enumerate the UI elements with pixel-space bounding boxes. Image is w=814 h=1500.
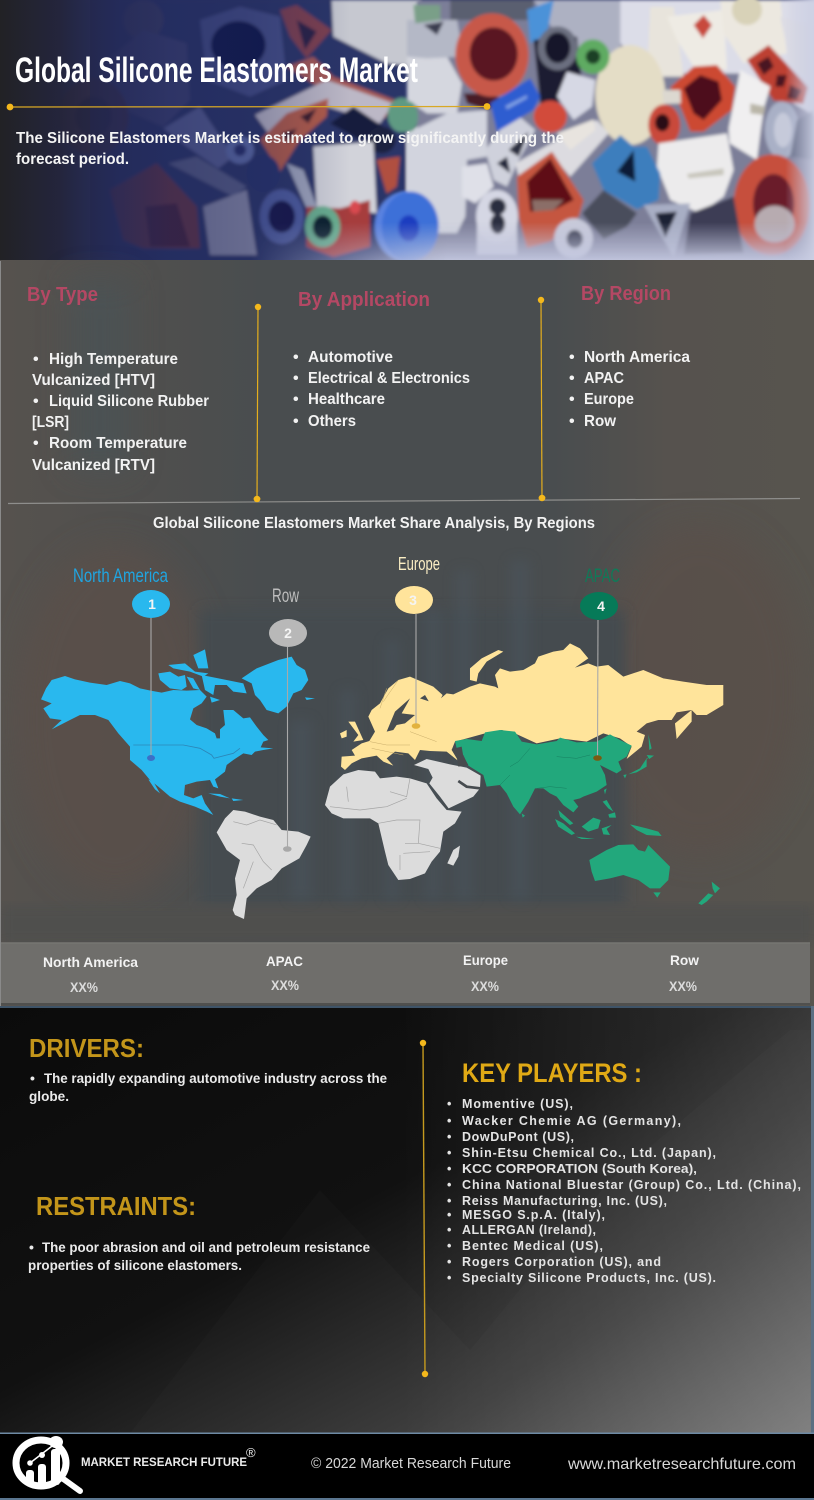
share: north america — [43, 954, 138, 995]
list: key players: • — [447, 1114, 451, 1128]
panel: hero photo banner — [0, 0, 814, 263]
brand name: MARKET RESEARCH FUTURE — [81, 1457, 247, 1469]
text: restraints: properties of silicone elastomers. — [28, 1257, 242, 1273]
intro text: forecast period. — [16, 151, 129, 168]
text: restraints — [28, 1239, 370, 1273]
list: by application: Electrical & Electronics — [308, 370, 470, 387]
list: key players: • — [447, 1146, 451, 1160]
marker 4 apac: APAC — [585, 566, 620, 587]
share: row — [669, 952, 699, 994]
list: by application: Healthcare — [308, 391, 385, 408]
share: row: XX% — [669, 978, 697, 994]
share: europe — [463, 952, 508, 994]
marker 1 north america — [73, 566, 170, 618]
list: key players: • — [447, 1097, 451, 1111]
list: key players — [447, 1097, 801, 1285]
share: europe: XX% — [471, 978, 499, 994]
marker 4 apac — [580, 566, 620, 620]
leader lines and markers — [147, 614, 602, 852]
list: key players: • — [447, 1271, 451, 1285]
heading: drivers: DRIVERS: — [29, 1033, 144, 1063]
share: north america: XX% — [70, 979, 98, 995]
marker 2 row: 2 — [284, 625, 292, 641]
list: by region: Europe — [584, 391, 634, 408]
share: europe: Europe — [463, 952, 508, 968]
icon: market research future logo — [16, 1436, 80, 1491]
divider: key players — [420, 1040, 428, 1377]
photo: right profiles — [382, 0, 814, 263]
list: by application: • — [293, 413, 299, 430]
list: by application: • — [293, 391, 299, 408]
list: key players: • — [447, 1223, 451, 1237]
brand name — [81, 1445, 256, 1469]
list: by region: • — [569, 370, 575, 387]
list: key players: Wacker Chemie AG (Germany), — [462, 1114, 681, 1128]
list: key players: ALLERGAN (Ireland), — [462, 1223, 596, 1237]
brand name: ® — [246, 1445, 256, 1460]
copyright: © 2022 Market Research Future — [311, 1455, 511, 1472]
list: by type: • — [33, 351, 39, 368]
list: by region: Row — [584, 413, 617, 430]
list: key players: • — [447, 1194, 451, 1208]
marker 1 north america: North America — [73, 566, 168, 587]
text: restraints: • — [29, 1239, 34, 1255]
text: drivers — [29, 1070, 387, 1104]
heading: restraints: RESTRAINTS: — [36, 1191, 196, 1221]
marker 2 row: Row — [272, 586, 299, 607]
panel: segmentation and map background — [0, 260, 814, 1008]
heading: by application: By Application — [298, 289, 430, 311]
share: apac — [266, 953, 303, 993]
share: apac: APAC — [266, 953, 303, 969]
title: Global Silicone Elastomers Market — [15, 51, 418, 90]
list: by region: • — [569, 349, 575, 366]
list: key players: China National Bluestar (Group) Co., Ltd. (China), — [462, 1178, 801, 1192]
share: row: Row — [670, 952, 699, 968]
list: by region: North America — [584, 349, 690, 366]
marker 3 europe — [395, 554, 440, 614]
vignette: bottom and right fade — [250, 0, 814, 261]
list: key players: • — [447, 1208, 451, 1222]
chart heading: Global Silicone Elastomers Market Share Analysis, By Regions — [153, 515, 595, 532]
list: by type — [32, 351, 209, 474]
share: apac: XX% — [271, 977, 299, 993]
overlay: dark left fade — [0, 0, 144, 260]
heading: by type: By Type — [27, 284, 98, 306]
region: row (south america, africa, middle east) — [217, 759, 481, 919]
list: key players: • — [447, 1130, 451, 1144]
list: by application — [293, 349, 470, 430]
list: by type: • — [33, 435, 39, 452]
text: drivers: globe. — [29, 1088, 69, 1104]
list: by application: • — [293, 349, 299, 366]
world map — [41, 614, 723, 919]
list: key players: • — [447, 1239, 451, 1253]
list: by region: • — [569, 413, 575, 430]
marker 2 row — [269, 586, 307, 647]
website: www.marketresearchfuture.com — [567, 1456, 796, 1473]
list: by type: High Temperature — [49, 351, 178, 368]
list: key players: Rogers Corporation (US), and — [462, 1255, 661, 1269]
marker 3 europe: 3 — [409, 592, 417, 608]
list: key players: KCC CORPORATION (South Korea), — [462, 1162, 697, 1176]
list: by application: Automotive — [308, 349, 393, 366]
heading: by region: By Region — [581, 283, 671, 305]
list: key players: Reiss Manufacturing, Inc. (US), — [462, 1194, 667, 1208]
list: by region — [569, 349, 690, 430]
list: key players: • — [447, 1162, 451, 1176]
marker 3 europe: Europe — [398, 554, 440, 574]
list: key players: MESGO S.p.A. (Italy), — [462, 1208, 605, 1222]
photo: left tinted profiles — [76, 0, 422, 260]
list: by region: • — [569, 391, 575, 408]
heading: key players: KEY PLAYERS : — [462, 1058, 642, 1088]
gold rule with endpoints — [7, 103, 490, 110]
list: by type: • — [33, 393, 39, 410]
list: key players: Momentive (US), — [462, 1097, 573, 1111]
text: drivers: • — [30, 1070, 35, 1086]
panel: share table — [1, 943, 810, 1004]
panel: drivers, restraints and key players — [0, 1006, 814, 1433]
list: by type: Liquid Silicone Rubber — [49, 393, 209, 410]
region: north america — [41, 649, 315, 815]
marker 4 apac: 4 — [597, 598, 605, 614]
list: by application: • — [293, 370, 299, 387]
share: north america: North America — [43, 954, 138, 970]
intro text — [16, 130, 564, 168]
list: key players: Bentec Medical (US), — [462, 1239, 603, 1253]
list: key players: DowDuPont (US), — [462, 1130, 574, 1144]
list: by type: [LSR] — [32, 414, 69, 431]
text: restraints: The poor abrasion and oil and petroleum resistance — [42, 1239, 370, 1255]
list: key players: Specialty Silicone Products, Inc. (US). — [462, 1271, 716, 1285]
region: apac — [452, 730, 720, 905]
list: by type: Vulcanized [HTV] — [32, 372, 155, 389]
panel: footer — [0, 1432, 814, 1500]
text: drivers: The rapidly expanding automotive industry across the — [44, 1070, 387, 1086]
column dividers — [8, 297, 800, 504]
marker 1 north america: 1 — [148, 596, 156, 612]
list: by type: Room Temperature — [49, 435, 187, 452]
intro text: The Silicone Elastomers Market is estimated to grow significantly during the — [16, 130, 564, 147]
list: key players: • — [447, 1255, 451, 1269]
region: europe and russia — [340, 643, 723, 770]
list: key players: Shin-Etsu Chemical Co., Ltd. (Japan), — [462, 1146, 716, 1160]
list: key players: • — [447, 1178, 451, 1192]
overlay: navy tint — [104, 0, 336, 258]
list: by application: Others — [308, 413, 356, 430]
list: by region: APAC — [584, 370, 624, 387]
list: by type: Vulcanized [RTV] — [32, 457, 155, 474]
